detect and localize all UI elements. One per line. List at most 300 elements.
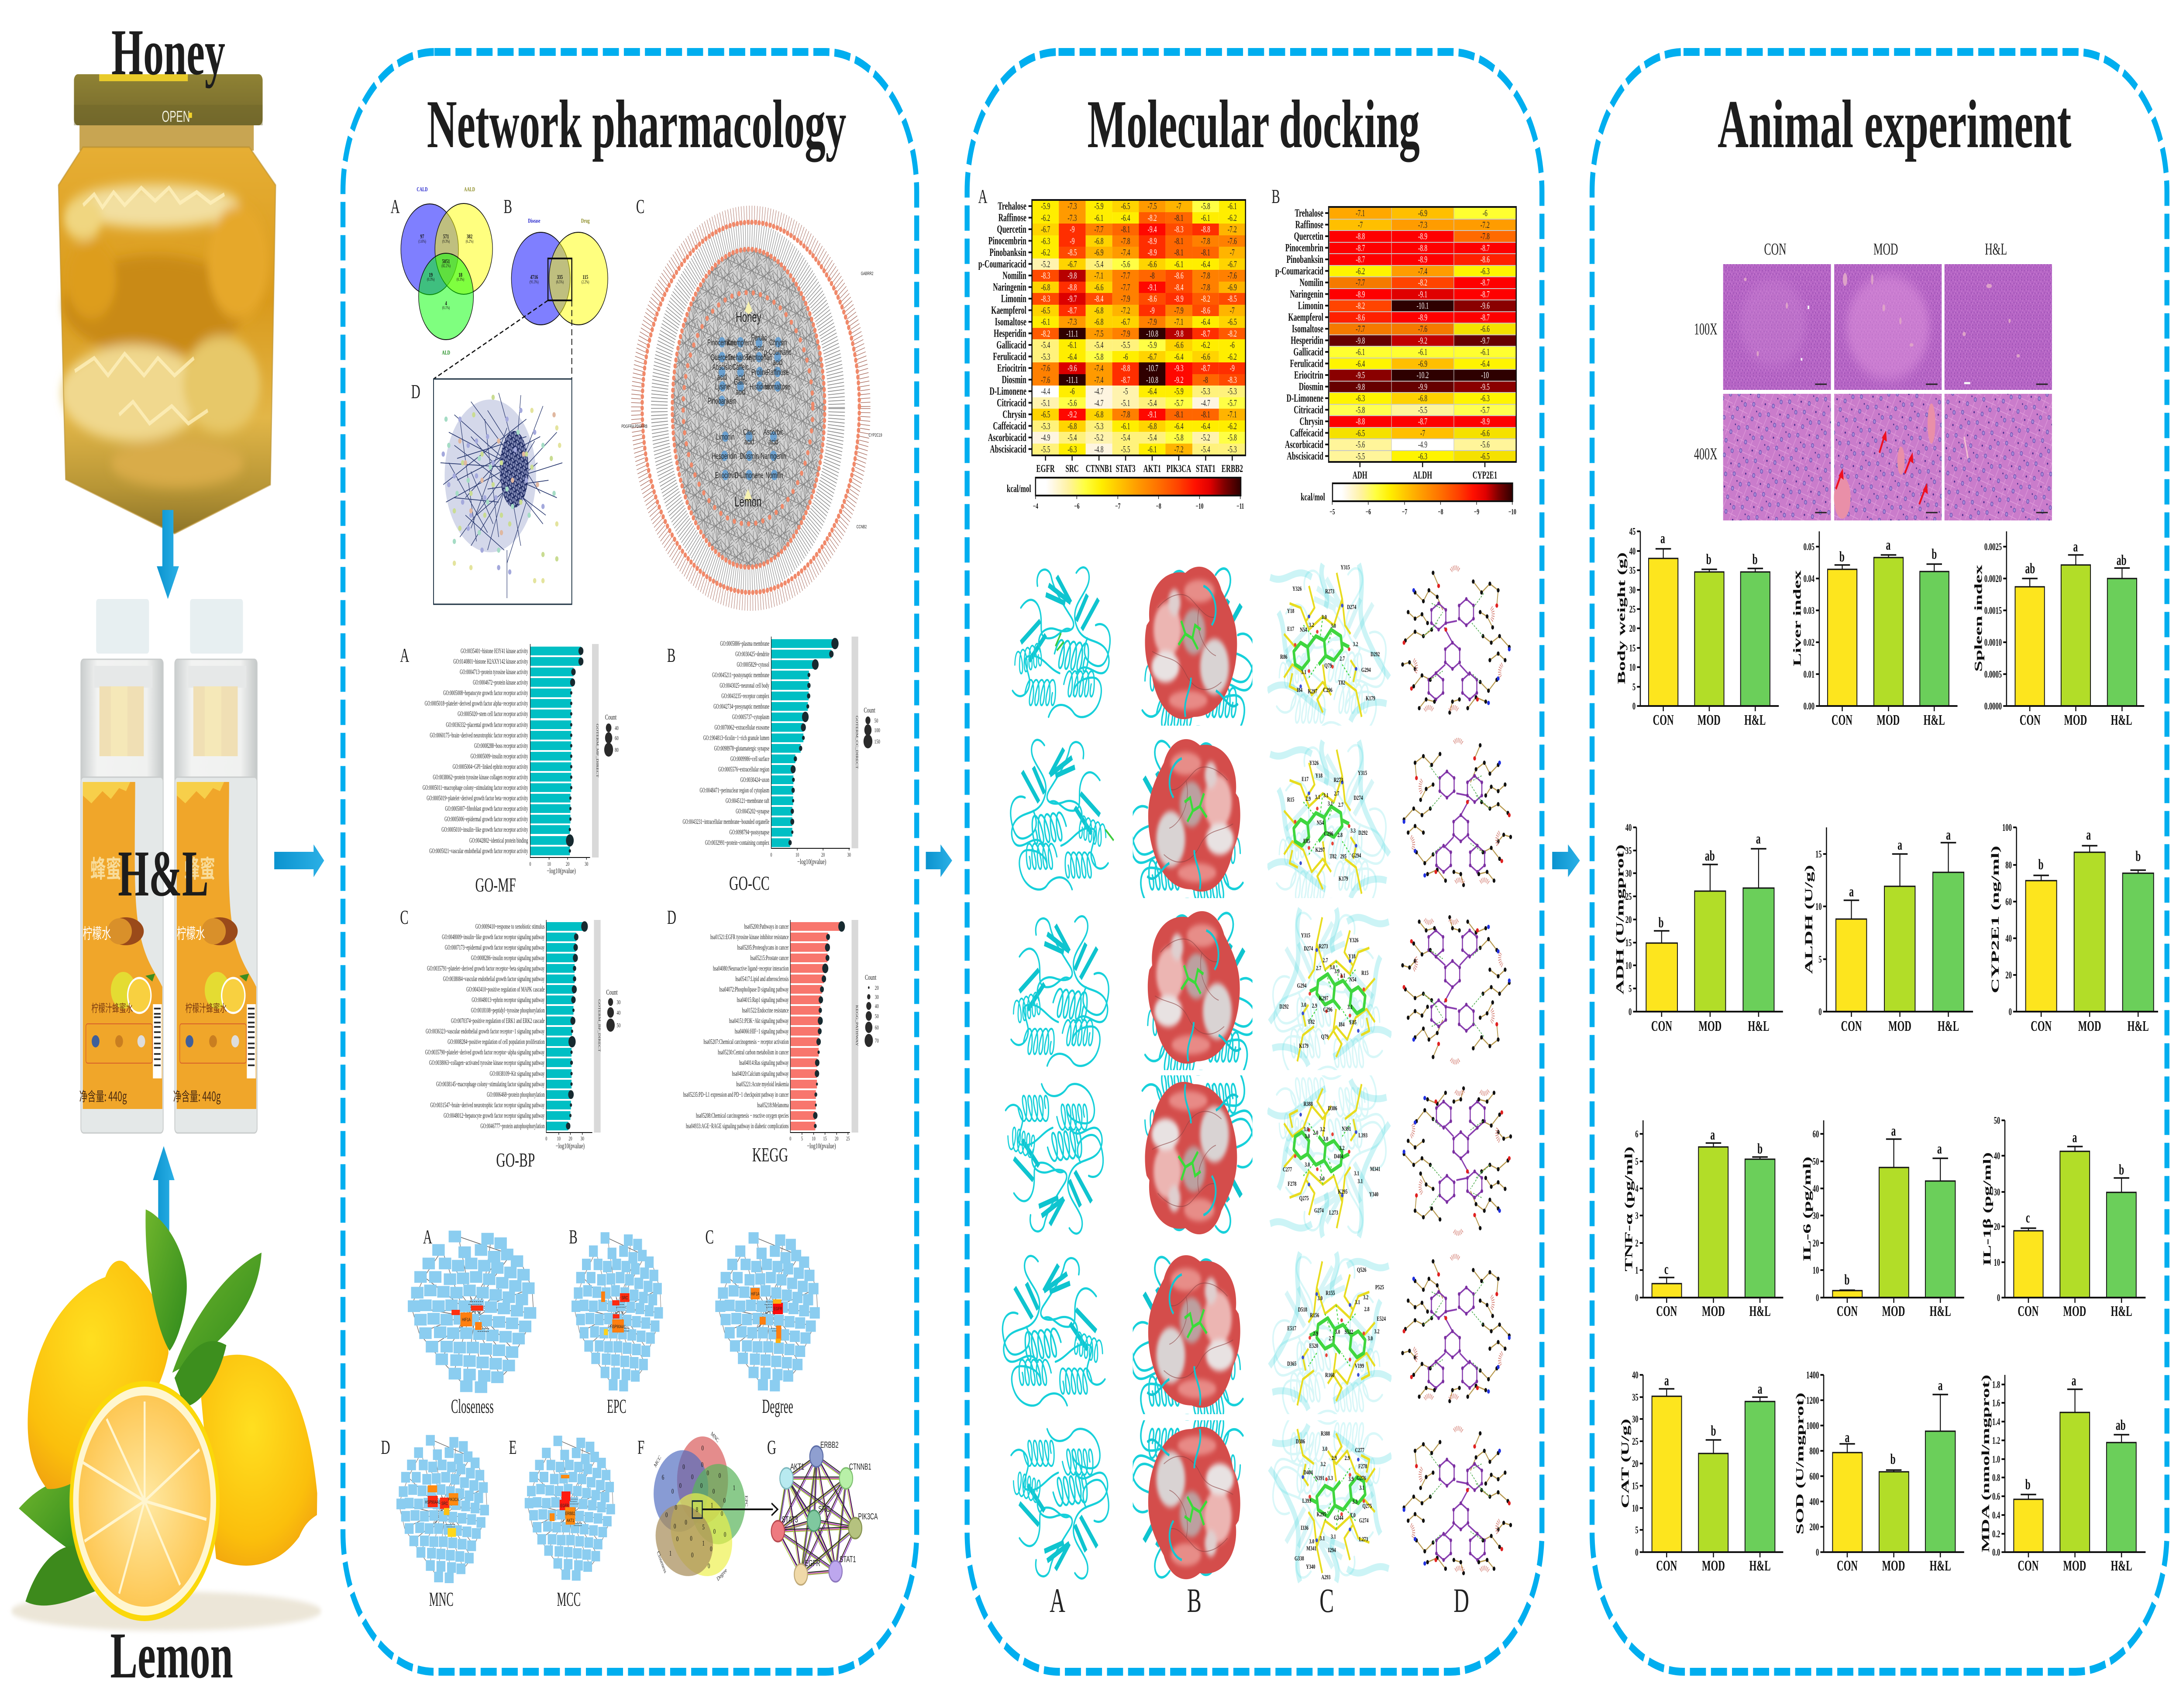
chart: five-set Venn F: 0 (674, 1522, 676, 1531)
heatmap B: compounds vs alcohol-metabolizing enzymes: -10 (1481, 370, 1489, 380)
heatmap B: compounds vs alcohol-metabolizing enzymes: -7 (1420, 428, 1425, 438)
network: MNC: D (381, 1437, 390, 1459)
bar chart: Body weight: b (1706, 551, 1711, 568)
bar chart: ADH: 20 (1625, 915, 1632, 926)
docking column C: residue interactions: 295 (1340, 853, 1346, 860)
docking column C: residue interactions: S522 (1345, 1328, 1353, 1336)
docking column C: residue interactions: Y315 (1301, 932, 1310, 939)
heatmap A: compounds vs hub targets: -7.6 (1041, 375, 1050, 385)
docking column C: residue interactions: Y18 (1315, 772, 1322, 779)
docking column C: residue interactions: T82 (1329, 853, 1336, 860)
chart: GO-CC enrichment: 100 (875, 727, 880, 734)
chart: honey-lemon compound-target network C: PDGFRA PDGFRB (621, 424, 647, 429)
chart: hub-target network G (767, 1437, 878, 1585)
network: EPC: HSP90AA1 (610, 1324, 626, 1329)
docking column C: residue interactions: Y326 (1292, 585, 1302, 592)
heatmap A: compounds vs hub targets: -5.4 (1067, 432, 1077, 443)
heatmap B: compounds vs alcohol-metabolizing enzymes: D-Limonene (1287, 392, 1323, 404)
docking column C: residue interactions: C277 (1355, 1446, 1364, 1454)
chart: GO-BP enrichment: 40 (616, 1009, 620, 1016)
chart: KEGG enrichment: 10 (812, 1136, 816, 1142)
heatmap A: compounds vs hub targets: -7.2 (1174, 444, 1184, 454)
chart: two-set Venn B: (6.5%) (556, 280, 564, 284)
heatmap B: compounds vs alcohol-metabolizing enzymes: CYP2E1 (1473, 470, 1497, 481)
heatmap A: compounds vs hub targets: -7.2 (1121, 305, 1130, 315)
heatmap A: compounds vs hub targets: -5.8 (1094, 351, 1103, 362)
docking column C: residue interactions: 2.7 (1329, 1335, 1334, 1342)
bar chart: Spleen index: MOD (2064, 712, 2087, 728)
heatmap A: compounds vs hub targets: -7.8 (1121, 409, 1130, 420)
heatmap A: compounds vs hub targets: -5.8 (1228, 432, 1237, 443)
chart: GO-CC enrichment: Count (864, 706, 875, 715)
docking column C: residue interactions: L273 (1359, 1536, 1368, 1543)
heatmap A: compounds vs hub targets: -7.4 (1094, 375, 1103, 385)
arrow: honey to product (157, 510, 179, 599)
chart: GO-BP enrichment: GO-BP (496, 1150, 535, 1171)
heatmap A: compounds vs hub targets: -5.4 (1201, 444, 1210, 454)
chart: five-set Venn F: 0 (690, 1535, 692, 1543)
heatmap B: compounds vs alcohol-metabolizing enzymes: kcal/mol (1301, 492, 1325, 503)
docking column C: residue interactions: D274 (1353, 794, 1363, 802)
heatmap B: compounds vs alcohol-metabolizing enzymes: Caffeicacid (1290, 427, 1323, 439)
heatmap A: compounds vs hub targets: -6.2 (1041, 212, 1050, 223)
heatmap B: compounds vs alcohol-metabolizing enzymes: -8.2 (1356, 300, 1365, 311)
heatmap A: compounds vs hub targets: -7.4 (1121, 247, 1130, 258)
heatmap B: compounds vs alcohol-metabolizing enzymes: -8.7 (1481, 277, 1490, 288)
docking column C: residue interactions: 3.0 (1323, 1135, 1328, 1143)
heatmap A: compounds vs hub targets: -6.2 (1201, 340, 1210, 350)
heatmap B: compounds vs alcohol-metabolizing enzymes: -8.8 (1356, 416, 1365, 427)
heatmap A: compounds vs hub targets: p-Coumaricacid (978, 258, 1026, 270)
heatmap A: compounds vs hub targets: -8.7 (1201, 328, 1210, 339)
heatmap B: compounds vs alcohol-metabolizing enzymes: -6.1 (1356, 347, 1365, 357)
chart: GO-MF enrichment: 0 (529, 861, 531, 868)
bar chart: CAT: 10 (1632, 1503, 1639, 1514)
chart: KEGG enrichment: hsa05208:Chemical carcinogenesis − reactive oxygen species (696, 1112, 788, 1119)
docking column C: residue interactions: 3.1 (1301, 668, 1306, 676)
chart: GO-BP enrichment: GO:0008284~positive regulation of cell population proliferation (448, 1038, 545, 1046)
docking column C: residue interactions: 3.0 (1367, 1335, 1373, 1342)
chart: GO-BP enrichment: GO:0070374~positive regulation of ERK1 and ERK2 cascade (451, 1017, 545, 1025)
heatmap A: compounds vs hub targets: -6.1 (1228, 201, 1237, 211)
heatmap A: compounds vs hub targets: -9.1 (1147, 409, 1157, 420)
chart: hub-target network G: ERBB2 (820, 1440, 839, 1450)
network: Degree: Degree (762, 1396, 793, 1418)
heatmap A: compounds vs hub targets: −6 (1074, 503, 1080, 511)
docking column C: residue interactions: 3.0 (1305, 1161, 1310, 1168)
chart: three-set Venn A: (0.3%) (457, 277, 464, 282)
chart: five-set Venn F: 0 (679, 1482, 682, 1490)
bar chart: CYP2E1: b (2135, 848, 2141, 864)
bar chart: MDA: 0.0 (1992, 1547, 2000, 1558)
bar chart: Body weight: 10 (1629, 662, 1636, 673)
heatmap B: compounds vs alcohol-metabolizing enzymes: -6.4 (1481, 358, 1490, 368)
docking column C: residue interactions: R15 (1287, 796, 1294, 803)
heatmap A: compounds vs hub targets: -6.8 (1094, 317, 1103, 327)
bar chart: TNF-alpha: 6 (1635, 1129, 1639, 1140)
docking column C: residue interactions: D386 (1296, 1438, 1305, 1445)
heatmap B: compounds vs alcohol-metabolizing enzymes: Quercetin (1294, 230, 1323, 242)
docking column B: binding-pocket surfaces (1131, 567, 1257, 1579)
chart: GO-BP enrichment: 30 (581, 1136, 584, 1142)
arrow: lemon to product (153, 1146, 175, 1234)
arrow: product to network pharmacology (274, 844, 324, 877)
heatmap A: compounds vs hub targets: -5.3 (1094, 421, 1103, 431)
network: MCC: E (509, 1437, 516, 1459)
bar chart: Body weight: H&L (1744, 712, 1766, 728)
chart: three-set Venn A: 97 (420, 233, 424, 240)
bar chart: Body weight: 15 (1629, 643, 1636, 654)
bar chart: CAT: 25 (1632, 1436, 1639, 1447)
chart: KEGG enrichment: hsa04072:Phospholipase D signaling pathway (720, 985, 789, 993)
heatmap A: compounds vs hub targets: -5.2 (1201, 432, 1210, 443)
heatmap A: compounds vs hub targets: -7.8 (1201, 236, 1210, 246)
docking column C: residue interactions: 3.0 (1319, 1175, 1325, 1182)
bar chart: CAT: 40 (1632, 1370, 1639, 1381)
docking column C: residue interactions: K297 (1315, 846, 1325, 854)
chart: KEGG enrichment: hsa04080:Neuroactive ligand−receptor interaction (713, 964, 789, 972)
heatmap A: compounds vs hub targets: -10.8 (1146, 328, 1158, 339)
bar chart: SOD: 1400 (1806, 1370, 1819, 1381)
bar chart: ADH: 25 (1625, 892, 1632, 902)
heatmap A: compounds vs hub targets: -5.5 (1121, 444, 1130, 454)
docking column C: residue interactions: 2.7 (1334, 790, 1339, 797)
bar chart: Body weight: 25 (1629, 604, 1636, 615)
bar chart: CAT: 5 (1635, 1525, 1639, 1536)
chart: five-set Venn F: 0 (713, 1528, 716, 1536)
docking column C: residue interactions: G338 (1295, 1555, 1304, 1562)
docking column C: residue interactions: G294 (1297, 982, 1307, 989)
bar chart: IL-6: a (1891, 1123, 1896, 1139)
heatmap A: compounds vs hub targets: -5.6 (1121, 258, 1130, 269)
docking column C: residue interactions: G344 (1334, 1514, 1343, 1522)
chart: five-set Venn F: 0 (706, 1469, 709, 1477)
chart: GO-CC enrichment: 0 (770, 852, 772, 858)
column labels A B C D: C (1319, 1582, 1334, 1620)
heatmap A: compounds vs hub targets: -6.1 (1174, 258, 1184, 269)
chart: five-set Venn F: Degree (716, 1567, 728, 1583)
docking column C: residue interactions: 3.1 (1359, 1484, 1364, 1491)
network: MNC: PIK3CA (448, 1497, 459, 1502)
icon: H&amp;L bottle right: 柠檬汁蜂蜜水 (186, 1000, 227, 1016)
heatmap B: compounds vs alcohol-metabolizing enzymes: -6.2 (1356, 265, 1365, 276)
bar chart: Spleen index: 0.0005 (1984, 669, 2002, 680)
docking column C: residue interactions: R160 (1325, 1371, 1334, 1379)
chart: hub-target network G: EGFR (805, 1558, 820, 1568)
chart: honey-lemon compound-target network C: Ascorbic (763, 428, 784, 437)
heatmap A: compounds vs hub targets: kcal/mol (1007, 483, 1031, 495)
heatmap A: compounds vs hub targets: -8.1 (1121, 224, 1130, 234)
docking column C: residue interactions: 3.1 (1347, 1003, 1353, 1011)
heatmap A: compounds vs hub targets: -8.2 (1201, 293, 1210, 304)
chart: five-set Venn F: 0 (691, 1551, 693, 1560)
chart: GO-CC enrichment: GO:0030424~axon (740, 776, 769, 784)
heatmap A: compounds vs hub targets: -5.3 (1041, 421, 1050, 431)
bar chart: ALDH: ALDH (U/g) (1803, 865, 1815, 974)
bar chart: IL-6: 20 (1813, 1238, 1819, 1249)
heatmap A: compounds vs hub targets: -8.3 (1041, 270, 1050, 281)
docking column C: residue interactions: D292 (1358, 829, 1367, 837)
bar chart: Spleen index: 0.0025 (1984, 542, 2002, 553)
heatmap A: compounds vs hub targets: PIK3CA (1167, 463, 1191, 475)
bar chart: Body weight: 40 (1629, 546, 1636, 557)
bar chart: TNF-alpha: 5 (1635, 1157, 1639, 1167)
chart: GO-MF enrichment (400, 644, 619, 896)
chart: GO-MF enrichment: GO:0060175~brain−derived neurotrophic factor receptor activity (430, 731, 528, 739)
docking column C: residue interactions: P525 (1375, 1284, 1384, 1291)
chart: KEGG enrichment: KEGG_PATHWAY (855, 1005, 859, 1046)
heatmap B: compounds vs alcohol-metabolizing enzymes: -6.5 (1356, 428, 1365, 438)
heatmap A: compounds vs hub targets: -8.3 (1041, 293, 1050, 304)
icon: H&amp;L bottle right: 柠檬水 (177, 922, 205, 944)
heatmap A: compounds vs hub targets: -6.1 (1094, 212, 1103, 223)
heatmap A: compounds vs hub targets: -8.1 (1174, 212, 1184, 223)
heatmap A: compounds vs hub targets: -4.4 (1041, 386, 1050, 396)
docking column C: residue interactions: G274 (1314, 1207, 1324, 1214)
chart: GO-BP enrichment: GO:0007173~epidermal growth factor receptor signaling pathway (445, 944, 545, 951)
heatmap B: compounds vs alcohol-metabolizing enzymes: Isomaltose (1292, 322, 1323, 335)
heatmap A: compounds vs hub targets: -7.1 (1094, 270, 1103, 281)
chart: KEGG enrichment: hsa04015:Rap1 signaling pathway (737, 996, 789, 1004)
bar chart: IL-1 beta: c (2026, 1210, 2030, 1226)
chart: GO-MF enrichment: GO-MF (475, 875, 516, 896)
docking column C: residue interactions: 3.0 (1304, 1126, 1309, 1133)
heatmap A: compounds vs hub targets: -8.6 (1174, 270, 1184, 281)
heatmap A: compounds vs hub targets: -6.4 (1067, 351, 1077, 362)
docking column C: residue interactions: 3.3 (1352, 1498, 1357, 1505)
chart: honey-lemon compound-target network C: acid (773, 358, 782, 367)
chart: hub-target network G: CTNNB1 (849, 1462, 871, 1472)
chart: honey-lemon compound-target network C: Limonin (716, 433, 734, 442)
heatmap B: compounds vs alcohol-metabolizing enzymes: -7.4 (1418, 265, 1427, 276)
network: Degree (705, 1226, 820, 1418)
docking column C: residue interactions: R273 (1319, 943, 1328, 950)
chart: GO-BP enrichment: C (400, 907, 409, 929)
heatmap A: compounds vs hub targets: AKT1 (1143, 463, 1161, 475)
bar chart: CYP2E1: 40 (2005, 933, 2012, 944)
docking column C: residue interactions: N391 (1315, 1474, 1324, 1482)
docking column C: residue interactions: E17 (1287, 625, 1294, 633)
heatmap A: compounds vs hub targets: -8.1 (1201, 409, 1210, 420)
docking column C: residue interactions: 3.0 (1331, 622, 1336, 630)
docking column C: residue interactions: C296 (1324, 830, 1333, 837)
chart: two-set Venn B (434, 196, 608, 379)
heatmap B: compounds vs alcohol-metabolizing enzymes: -6.3 (1356, 393, 1365, 403)
docking column C: residue interactions: L273 (1329, 1209, 1338, 1216)
label: H&amp;L: H&L (118, 837, 209, 910)
chart: GO-MF enrichment: GO:0005020~stem cell factor receptor activity (458, 710, 528, 718)
bar chart: MDA: MDA (nmol/mgprot) (1980, 1374, 1992, 1553)
bar chart: TNF-alpha: CON (1656, 1303, 1677, 1319)
bar chart: IL-1 beta: 10 (1994, 1257, 2000, 1268)
heatmap A: compounds vs hub targets: -9.8 (1067, 270, 1077, 281)
chart: honey-lemon compound-target network C: CCNB2 (857, 524, 867, 529)
bar chart: ADH: 35 (1625, 846, 1632, 857)
chart: PPI network D (411, 379, 572, 604)
chart: GO-BP enrichment: GO:0038109~Kit signaling pathway (490, 1070, 545, 1078)
chart: GO-CC enrichment: 10 (795, 852, 799, 858)
heatmap A: compounds vs hub targets: -8.4 (1174, 282, 1184, 293)
arrow: molecular docking to animal experiment (1552, 844, 1580, 877)
chart: GO-CC enrichment: GO:0043231~intracellular membrane−bounded organelle (683, 818, 769, 826)
network: Closeness: Closeness (451, 1396, 494, 1418)
heatmap A: compounds vs hub targets: -6.4 (1174, 351, 1184, 362)
docking column C: residue interactions: 3.1 (1354, 1170, 1359, 1177)
chart: KEGG enrichment: Count (865, 974, 876, 982)
bar chart: TNF-alpha: 1 (1635, 1265, 1639, 1276)
bar chart: SOD: 1000 (1806, 1421, 1819, 1432)
heatmap A: compounds vs hub targets: -5.7 (1174, 397, 1184, 408)
bar chart: Body weight (1615, 527, 1779, 728)
network: MCC: EGFR (560, 1503, 569, 1508)
heatmap B: compounds vs alcohol-metabolizing enzymes: -6.9 (1418, 208, 1427, 218)
bar chart: Liver index: 0.05 (1804, 542, 1815, 553)
chart: GO-CC enrichment: GO:0098794~postsynapse (730, 828, 769, 836)
heatmap B: compounds vs alcohol-metabolizing enzymes: -6.6 (1481, 428, 1490, 438)
docking column C: residue interactions: 2.7 (1323, 957, 1328, 964)
chart: three-set Venn A: (82.2%) (441, 264, 451, 268)
docking column C: residue interactions: 2.9 (1305, 795, 1311, 802)
panel border (343, 52, 917, 1672)
docking column C: residue interactions: E85 (1350, 1019, 1357, 1026)
heatmap A: compounds vs hub targets: -9.1 (1147, 282, 1157, 293)
chart: GO-CC enrichment: GO:0005737~cytoplasm (732, 713, 769, 721)
heatmap A: compounds vs hub targets: -8.5 (1228, 293, 1237, 304)
chart: honey-lemon compound-target network C: C (636, 196, 644, 218)
heatmap A: compounds vs hub targets: -7.9 (1147, 317, 1157, 327)
bar chart: CAT: 30 (1632, 1414, 1639, 1425)
chart: honey-lemon compound-target network C: acid (736, 373, 745, 382)
chart: GO-CC enrichment: 30 (847, 852, 851, 858)
heatmap A: compounds vs hub targets: -7.9 (1121, 328, 1130, 339)
chart: GO-BP enrichment: GO:0038084~vascular endothelial growth factor signaling pathway (443, 975, 545, 983)
heatmap A: compounds vs hub targets: -11.1 (1066, 328, 1078, 339)
chart: five-set Venn F: 0 (710, 1545, 713, 1553)
network: MNC (381, 1437, 489, 1611)
bar chart: ALDH: 5 (1818, 954, 1822, 965)
network: EPC: EPC (607, 1396, 627, 1418)
docking column C: residue interactions: R273 (1325, 588, 1334, 595)
heatmap A: compounds vs hub targets: -6.7 (1067, 258, 1077, 269)
docking column C: residue interactions: Y315 (1341, 564, 1350, 571)
chart: GO-CC enrichment: 150 (875, 738, 880, 745)
chart: three-set Venn A: 5051 (442, 258, 450, 265)
chart: KEGG enrichment: hsa05230:Central carbon metabolism in cancer (718, 1048, 789, 1056)
heatmap A: compounds vs hub targets: -9 (1230, 363, 1235, 373)
chart: five-set Venn F: 1 (711, 1501, 713, 1510)
heatmap A: compounds vs hub targets: -9 (1150, 305, 1155, 315)
chart: hub-target network G: AKT1 (790, 1462, 804, 1472)
heatmap A: compounds vs hub targets: -9.3 (1174, 363, 1184, 373)
heatmap B: compounds vs alcohol-metabolizing enzymes: -8.7 (1481, 312, 1490, 322)
histology grid: H&L (1985, 240, 2007, 258)
heatmap A: compounds vs hub targets: Limonin (1001, 292, 1026, 305)
chart: GO-MF enrichment: GO:0005004~GPI−linked ephrin receptor activity (453, 763, 528, 771)
bar chart: Liver index: b (1839, 549, 1845, 565)
network: Closeness: A (423, 1226, 432, 1248)
bar chart: Body weight: 0 (1632, 701, 1636, 712)
chart: GO-CC enrichment: 20 (821, 852, 825, 858)
chart: KEGG enrichment: hsa01522:Endocrine resistance (742, 1006, 789, 1014)
docking column C: residue interactions: R156 (1310, 1312, 1319, 1319)
docking column C: residue interactions: 3.0 (1335, 1328, 1340, 1336)
docking column C: residue interactions: I84 (1339, 1021, 1345, 1028)
heatmap A: compounds vs hub targets: Nomilin (1002, 269, 1026, 282)
chart: KEGG enrichment: 50 (875, 1013, 879, 1020)
chart: three-set Venn A: 19 (429, 272, 433, 279)
bar chart: SOD: SOD (U/mgprot) (1794, 1392, 1806, 1535)
chart: KEGG enrichment (667, 907, 879, 1166)
chart: five-set Venn F: 0 (671, 1488, 674, 1496)
heatmap A: compounds vs hub targets: -6.2 (1228, 351, 1237, 362)
chart: GO-MF enrichment: 30 (585, 861, 589, 868)
chart: honey-lemon compound-target network C: Lemon (734, 494, 761, 510)
heatmap B: compounds vs alcohol-metabolizing enzymes: -7.2 (1481, 219, 1490, 230)
heatmap A: compounds vs hub targets: -5.2 (1094, 432, 1103, 443)
heatmap A: compounds vs hub targets: -6.8 (1041, 282, 1050, 293)
heatmap A: compounds vs hub targets: -6.4 (1201, 317, 1210, 327)
bar chart: CAT: CON (1656, 1558, 1677, 1574)
heatmap B: compounds vs alcohol-metabolizing enzymes: -7 (1358, 219, 1363, 230)
heatmap A: compounds vs hub targets: -5.2 (1041, 258, 1050, 269)
chart: two-set Venn B: (2.2%) (582, 280, 589, 284)
docking column C: residue interactions: 3.1 (1323, 792, 1329, 799)
heatmap A: compounds vs hub targets: -6.4 (1174, 421, 1184, 431)
heatmap A: compounds vs hub targets: -9.8 (1174, 328, 1184, 339)
heatmap A: compounds vs hub targets: Eriocitrin (997, 362, 1026, 374)
chart: three-set Venn A: (1.6%) (418, 239, 426, 244)
chart: GO-MF enrichment: GO:0005007~fibroblast growth factor receptor activity (445, 805, 528, 813)
bar chart: Body weight: MOD (1698, 712, 1721, 728)
chart: KEGG enrichment: hsa05215:Prostate cancer (751, 954, 789, 962)
panel: Network pharmacology (343, 52, 917, 1672)
bar chart: CYP2E1: b (2038, 857, 2043, 873)
chart: GO-CC enrichment: GO:1904813~ficolin−1−rich granule lumen (703, 734, 769, 742)
chart: three-set Venn A: ALD (442, 349, 450, 356)
bar chart: Liver index: CON (1832, 712, 1852, 728)
bar chart: SOD: b (1890, 1451, 1896, 1467)
chart: GO-BP enrichment: GOTERM_BP_DIRECT (597, 999, 601, 1052)
bar chart: MDA: 1.4 (1992, 1417, 2001, 1428)
heatmap B: compounds vs alcohol-metabolizing enzymes: -9.7 (1481, 335, 1490, 346)
chart: three-set Venn A: A (391, 196, 400, 218)
bar chart: TNF-alpha: MOD (1702, 1303, 1725, 1319)
heatmap A: compounds vs hub targets: -8.4 (1094, 293, 1103, 304)
chart: KEGG enrichment: hsa05218:Melanoma (757, 1101, 789, 1109)
heatmap B: compounds vs alcohol-metabolizing enzymes: −10 (1508, 508, 1516, 517)
docking column C: residue interactions: Q275 (1363, 1502, 1372, 1510)
chart: honey-lemon compound-target network C: CYP2C19 (869, 432, 882, 437)
docking column C: residue interactions: 2.9 (1312, 1002, 1317, 1009)
heatmap A: compounds vs hub targets: -8.5 (1067, 247, 1077, 258)
bar chart: TNF-alpha: b (1757, 1141, 1763, 1157)
chart: five-set Venn F: 0 (675, 1504, 677, 1512)
heatmap A: compounds vs hub targets: -9 (1070, 236, 1074, 246)
heatmap B: compounds vs alcohol-metabolizing enzymes: -8.9 (1481, 416, 1490, 427)
docking column C: residue interactions: 2.7 (1339, 655, 1345, 662)
bar chart: Liver index: a (1886, 537, 1890, 553)
chart: GO-BP enrichment: GO:0036323~vascular endothelial growth factor receptor−1 signaling pathway (426, 1027, 545, 1035)
chart: five-set Venn F: 0 (724, 1531, 726, 1539)
heatmap A: compounds vs hub targets: -4.7 (1094, 397, 1103, 408)
docking column C: residue interactions: 3.1 (1355, 1298, 1360, 1306)
chart: GO-BP enrichment: Count (606, 988, 618, 997)
heatmap B: compounds vs alcohol-metabolizing enzymes: −5 (1329, 508, 1335, 517)
heatmap A: compounds vs hub targets: -8 (1203, 375, 1208, 385)
bar chart: SOD: 1200 (1806, 1395, 1819, 1406)
heatmap B: compounds vs alcohol-metabolizing enzymes: −6 (1366, 508, 1371, 517)
heatmap A: compounds vs hub targets: -5.4 (1121, 432, 1130, 443)
